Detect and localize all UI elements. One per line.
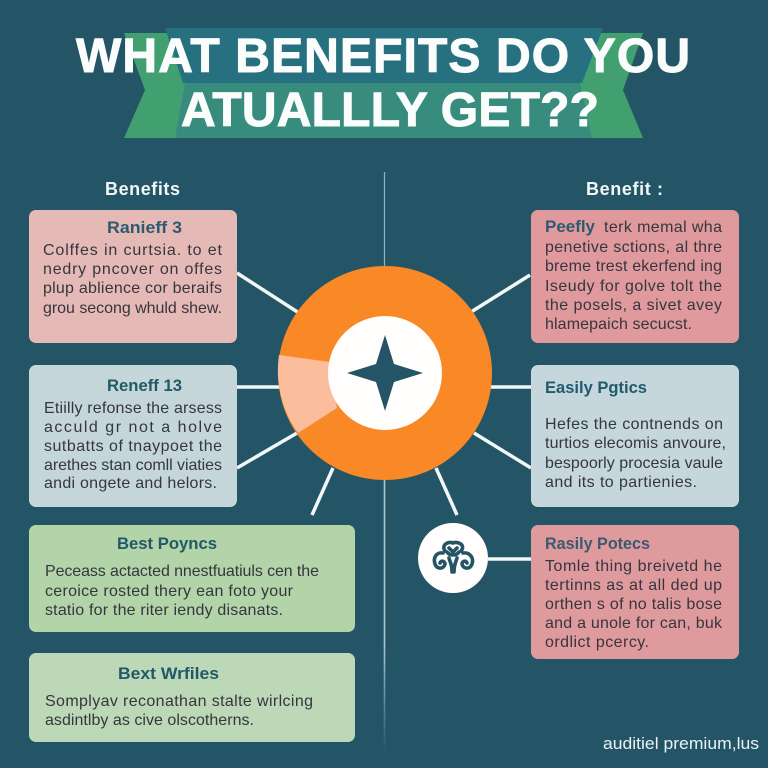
panel: middle right blue card: bespoorly procesia vaule xyxy=(545,455,723,472)
column heading: left: Benefits xyxy=(105,179,180,199)
panel: top left pink card: Colffes in curtsia. to et xyxy=(43,242,223,259)
connector spokes xyxy=(237,273,531,559)
panel: lower left green card: ceroice rosted thery ean foto your xyxy=(45,583,294,600)
panel: lower right red card: and a unole for can, buk xyxy=(545,615,723,632)
panel: top right red card: Peefly xyxy=(545,217,596,236)
panel: lower right red card xyxy=(531,525,739,659)
panel: middle right blue card: turtios elecomis anvoure, xyxy=(545,435,726,452)
panel: middle left blue card: andi ongete and helors. xyxy=(44,475,217,492)
icon: tree emblem xyxy=(418,523,488,593)
panel: top right red card xyxy=(531,210,739,343)
panel: lower left green card: statio for the riter iendy disanats. xyxy=(45,602,283,619)
panel: top right red card: penetive sctions, al thre xyxy=(545,239,722,256)
panel: middle left blue card: acculd gr not a holve xyxy=(44,419,222,436)
panel: top right red card: Iseudy for golve tolt the xyxy=(545,278,722,295)
panel: middle left blue card xyxy=(29,365,237,507)
panel: middle left blue card: Etiilly refonse the arsess xyxy=(44,400,222,417)
center divider line xyxy=(384,172,386,752)
title xyxy=(76,30,690,137)
title: WHAT BENEFITS DO YOU xyxy=(76,30,690,83)
panel: top right red card: breme trest ekerfend ing xyxy=(545,258,722,275)
column heading: right: Benefit : xyxy=(586,179,663,199)
panel: lower right red card: Rasily Potecs xyxy=(545,534,650,553)
panel: bottom left green card: Somplyav reconathan stalte wirlcing xyxy=(45,693,313,710)
panel: top right red card: terk memal wha xyxy=(604,219,722,236)
panel: middle right blue card: Easily Pgtics xyxy=(545,378,647,397)
panel: lower left green card: Peceass actacted nnestfuatiuls cen the xyxy=(45,563,319,580)
panel: top left pink card: grou secong whuld shew. xyxy=(43,300,222,317)
panel: bottom left green card: asdintlby as cive olscotherns. xyxy=(45,712,254,729)
title ribbon xyxy=(124,28,643,138)
panel: top left pink card: nedry pncover on offes xyxy=(43,261,222,278)
panel: top right red card: hlamepaich secucst. xyxy=(545,316,692,333)
footer source text: auditiel premium,lus xyxy=(603,734,759,753)
panel: middle right blue card: Hefes the contnends on xyxy=(545,416,723,433)
panel: lower left green card: Best Poyncs xyxy=(117,534,217,553)
panel: lower right red card: ordlict pcercy. xyxy=(545,634,649,651)
panel: middle right blue card xyxy=(531,365,739,507)
panel: middle right blue card: and its to partienies. xyxy=(545,474,697,491)
panel: top left pink card xyxy=(29,210,237,343)
panel: top right red card: the posels, a sivet avey xyxy=(545,297,722,314)
panel: top left pink card: plup ablience cor beraifs xyxy=(43,280,222,297)
panel: lower right red card: orthen s of no talis bose xyxy=(545,596,722,613)
panel: top left pink card: Ranieff 3 xyxy=(107,218,182,237)
panel: bottom left green card: Bext Wrfiles xyxy=(118,664,219,683)
panel: lower right red card: Tomle thing breivetd he xyxy=(545,558,722,575)
title: ATUALLLY GET?? xyxy=(181,84,599,137)
icon: four-point star xyxy=(347,335,423,411)
panel: lower right red card: tertinns as at all ded up xyxy=(545,577,722,594)
panel: bottom left green card xyxy=(29,653,355,742)
panel: middle left blue card: sutbatts of tnaypoet the xyxy=(44,438,222,455)
central donut chart xyxy=(278,266,492,480)
panel: middle left blue card: Reneff 13 xyxy=(107,376,182,395)
panel: lower left green card xyxy=(29,525,355,632)
panel: middle left blue card: arethes stan comll viaties xyxy=(44,457,222,474)
